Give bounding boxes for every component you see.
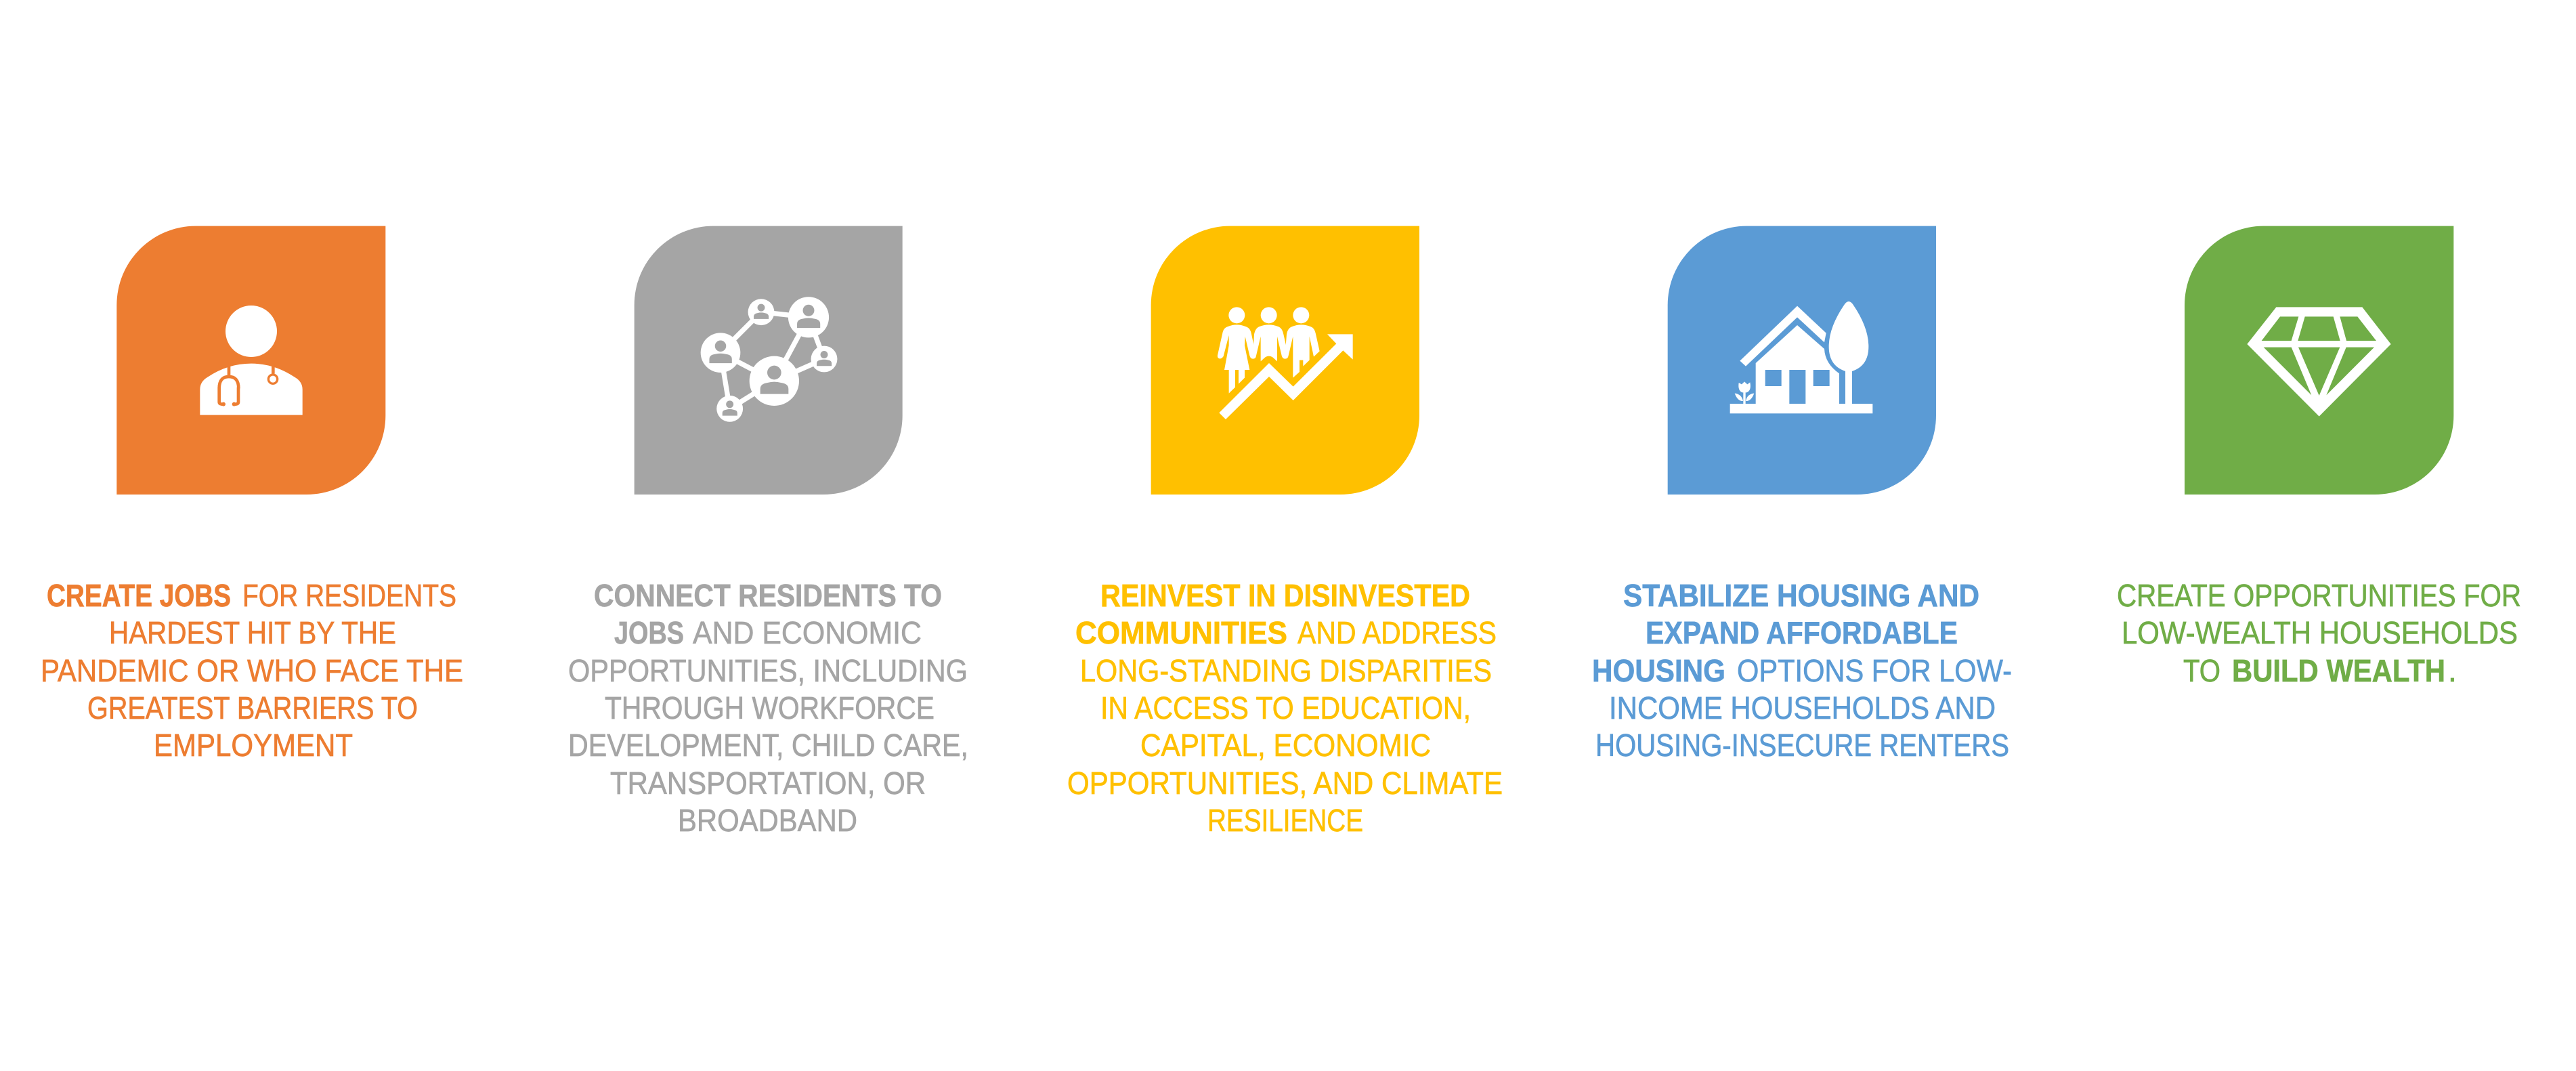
tile: gold leaf shape <box>1151 226 1419 495</box>
text: reinvest description <box>1067 578 1503 838</box>
icon: diamond <box>2247 307 2391 417</box>
text: connect residents description: DEVELOPMENT, CHILD CARE, <box>568 728 968 763</box>
panel: reinvest in communities <box>1067 226 1503 838</box>
tile: gray leaf shape <box>635 226 903 495</box>
icon: people with rising arrow <box>1218 307 1353 419</box>
text: create jobs description: HARDEST HIT BY THE <box>109 615 396 650</box>
text: stabilize housing description: STABILIZE HOUSING AND <box>1623 578 1979 613</box>
text: reinvest description: COMMUNITIES <box>1075 615 1287 650</box>
text: create jobs description: EMPLOYMENT <box>154 728 353 763</box>
text: create jobs description: GREATEST BARRIERS TO <box>87 690 418 726</box>
text: connect residents description: JOBS <box>614 615 684 650</box>
text: reinvest description: OPPORTUNITIES, AND CLIMATE <box>1067 765 1503 801</box>
text: reinvest description: CAPITAL, ECONOMIC <box>1140 728 1431 763</box>
text: build wealth description: . <box>2448 653 2457 688</box>
text: connect residents description: TRANSPORTATION, OR <box>610 765 926 801</box>
text: connect residents description <box>568 578 968 838</box>
text: create jobs description <box>41 578 463 763</box>
text: build wealth description: CREATE OPPORTUNITIES FOR <box>2117 578 2521 613</box>
panel: stabilize housing <box>1592 226 2012 763</box>
panel: build wealth <box>2117 226 2521 688</box>
text: stabilize housing description: OPTIONS FOR LOW- <box>1737 653 2012 688</box>
panel: connect residents <box>568 226 968 838</box>
text: create jobs description: CREATE JOBS <box>47 578 231 613</box>
text: stabilize housing description: EXPAND AFFORDABLE <box>1646 615 1958 650</box>
text: create jobs description: FOR RESIDENTS <box>242 578 456 613</box>
text: create jobs description: PANDEMIC OR WHO FACE THE <box>41 653 463 688</box>
text: connect residents description: THROUGH WORKFORCE <box>605 690 935 726</box>
icon: people network <box>701 297 837 422</box>
panel: create jobs <box>41 226 463 763</box>
text: reinvest description: IN ACCESS TO EDUCATION, <box>1100 690 1471 726</box>
text: build wealth description <box>2117 578 2521 688</box>
text: reinvest description: AND ADDRESS <box>1297 615 1497 650</box>
text: stabilize housing description: INCOME HOUSEHOLDS AND <box>1609 690 1996 726</box>
text: connect residents description: CONNECT RESIDENTS TO <box>594 578 942 613</box>
icon: doctor with stethoscope <box>200 306 303 415</box>
text: build wealth description: LOW-WEALTH HOUSEHOLDS <box>2122 615 2518 650</box>
text: reinvest description: REINVEST IN DISINVESTED <box>1100 578 1470 613</box>
text: connect residents description: BROADBAND <box>678 803 857 838</box>
text: stabilize housing description: HOUSING-INSECURE RENTERS <box>1595 728 2009 763</box>
tile: green leaf shape <box>2185 226 2453 495</box>
tile: blue leaf shape <box>1668 226 1936 495</box>
text: stabilize housing description: HOUSING <box>1592 653 1725 688</box>
text: build wealth description: BUILD WEALTH <box>2232 653 2445 688</box>
tile: orange leaf shape <box>116 226 385 495</box>
text: stabilize housing description <box>1592 578 2012 763</box>
text: build wealth description: TO <box>2183 653 2220 688</box>
text: connect residents description: AND ECONOMIC <box>693 615 922 650</box>
text: reinvest description: RESILIENCE <box>1207 803 1363 838</box>
icon: house with tree and flower <box>1730 301 1872 413</box>
text: reinvest description: LONG-STANDING DISPARITIES <box>1080 653 1492 688</box>
text: connect residents description: OPPORTUNITIES, INCLUDING <box>568 653 968 688</box>
